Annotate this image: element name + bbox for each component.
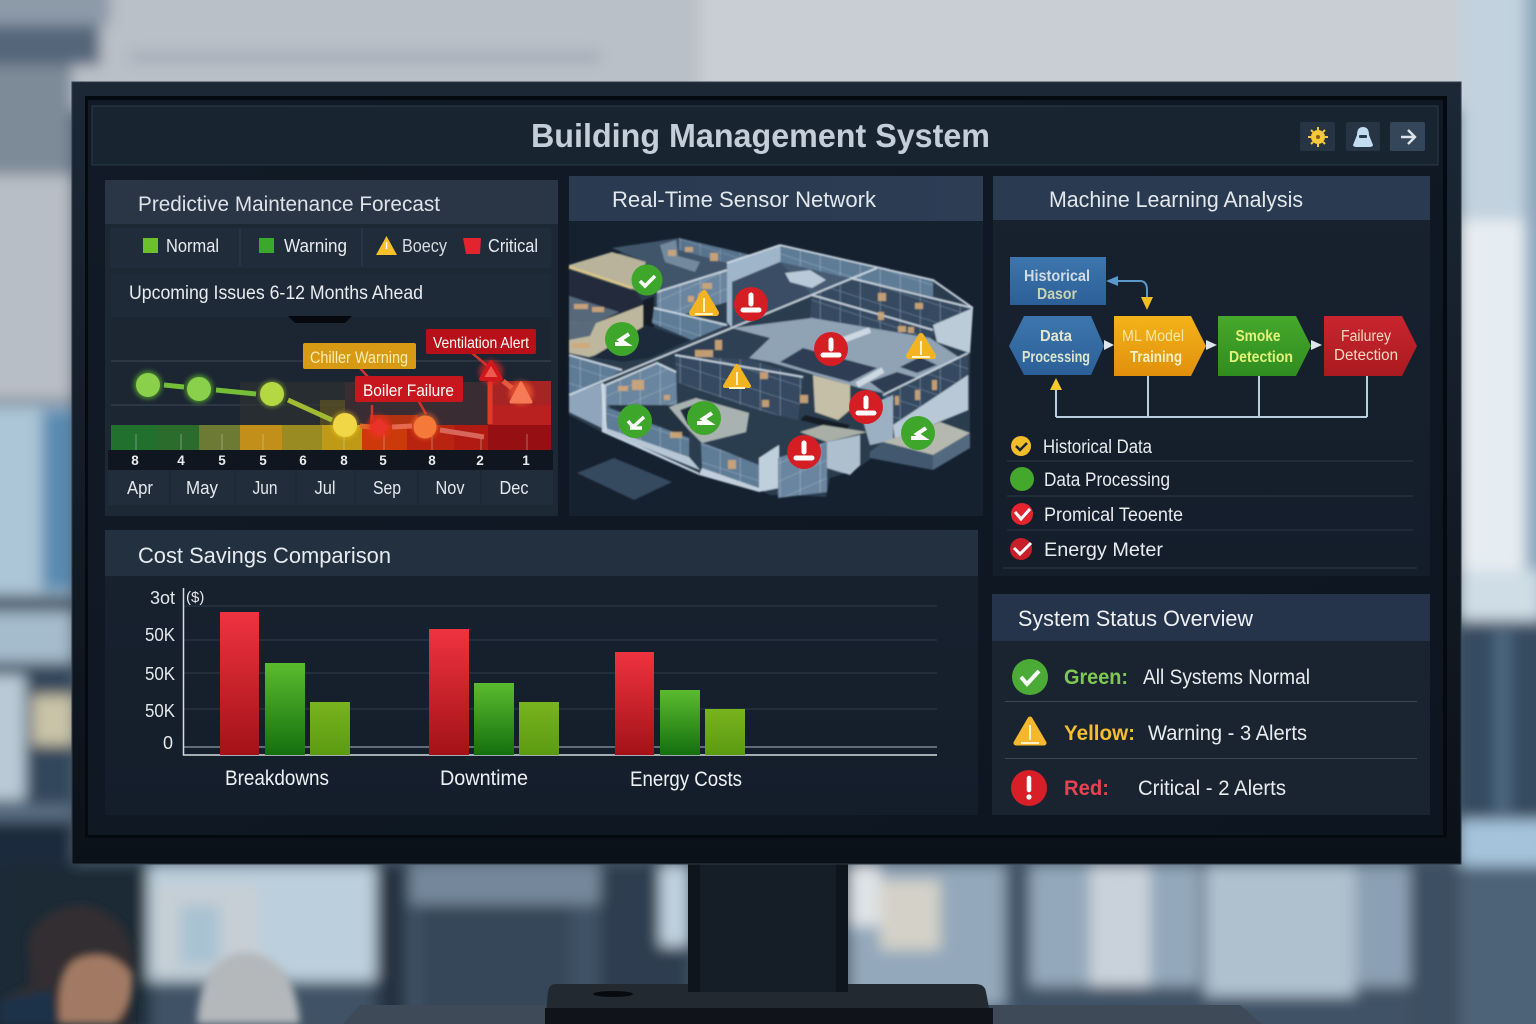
bar chart: ($) [186, 589, 204, 606]
list: ML inputs [1003, 436, 1417, 568]
icon: user [1346, 122, 1380, 151]
node: smoke detection [1218, 316, 1311, 376]
value row: 4 [177, 453, 185, 468]
month axis [108, 470, 553, 505]
value row: 8 [340, 453, 348, 468]
callout: boiler failure [355, 376, 463, 402]
status: yellow [1016, 719, 1307, 745]
value row: 2 [476, 453, 484, 468]
node: smoke detection: Smoke [1236, 328, 1281, 345]
icon: arrow [1390, 122, 1425, 151]
value row: 5 [259, 453, 267, 468]
node: data processing: Data [1040, 328, 1072, 345]
heading: predictive: Predictive Maintenance Forecast [138, 193, 440, 216]
value row: 6 [299, 453, 307, 468]
callout: chiller warning [303, 343, 416, 369]
right lower [883, 353, 968, 425]
bar chart: Breakdowns [225, 767, 329, 790]
list: ML inputs: Data Processing [1044, 470, 1170, 491]
node: historical data: Historical [1024, 268, 1090, 285]
bar chart: 50K [145, 664, 175, 684]
status: yellow: Yellow: [1064, 722, 1135, 745]
silhouette [569, 238, 973, 497]
month axis: Dec [500, 478, 528, 498]
back left glass [657, 270, 727, 322]
legend row: Critical [488, 236, 538, 256]
node: smoke detection: Detection [1229, 349, 1293, 366]
center back room [727, 245, 780, 328]
cream room top left [569, 252, 646, 290]
title: Building Management System [531, 117, 990, 154]
callout: boiler failure: Boiler Failure [363, 381, 454, 400]
monitor stand [545, 862, 993, 1024]
value row [108, 450, 553, 470]
heading: ML: Machine Learning Analysis [1049, 187, 1303, 212]
panel: predictive maintenance forecast [105, 180, 558, 516]
legend row: Warning [284, 236, 347, 256]
building isometric floorplan [569, 238, 973, 500]
panel: real-time sensor network [569, 176, 983, 516]
bar chart: 50K [145, 701, 175, 721]
sensors: critical [734, 287, 883, 469]
heading: sensor network: Real-Time Sensor Network [612, 187, 877, 212]
connectors [360, 353, 490, 420]
node: historical data [1010, 257, 1106, 305]
bar chart: Downtime [440, 767, 528, 790]
data points [134, 360, 533, 439]
centre floor [705, 318, 960, 395]
month axis: Jul [314, 478, 336, 498]
warm lights [572, 247, 937, 469]
value row: 8 [131, 453, 139, 468]
month axis: Nov [436, 478, 464, 498]
legend row [110, 228, 551, 268]
heading: cost savings: Cost Savings Comparison [138, 543, 391, 568]
monitor frame [72, 82, 1461, 864]
desk [343, 1005, 1262, 1024]
status: red [1011, 770, 1286, 806]
sensors: normal [605, 264, 935, 450]
forecast chart [111, 316, 551, 450]
list: ML inputs: Energy Meter [1044, 540, 1164, 561]
callout: ventilation alert [426, 329, 536, 354]
status: green: All Systems Normal [1143, 666, 1310, 689]
left lower rooms [569, 383, 602, 428]
month axis: Jun [252, 478, 278, 498]
front wall [602, 383, 699, 475]
value row: 5 [218, 453, 226, 468]
status: green: Green: [1064, 666, 1128, 689]
node: ML model training: Training [1130, 349, 1182, 366]
wall top edges [569, 245, 973, 430]
heat strip [111, 425, 551, 450]
panel: cost savings comparison [105, 530, 978, 815]
status: red: Critical - 2 Alerts [1138, 777, 1286, 800]
node: failure detection: Failurey [1341, 328, 1391, 345]
panel: machine learning analysis [993, 176, 1430, 576]
month axis: Sep [373, 478, 401, 498]
bar chart: Energy Costs [630, 768, 742, 791]
flow connectors [1050, 276, 1367, 417]
legend row: Normal [166, 236, 219, 256]
bar chart [145, 588, 937, 791]
node: ML model training: ML Model [1122, 328, 1184, 345]
node: data processing [1009, 316, 1104, 375]
legend row: Boecy [402, 236, 447, 256]
status: red: Red: [1064, 777, 1109, 800]
subheading: Upcoming Issues 6-12 Months Ahead [129, 283, 423, 304]
status: green [1012, 659, 1310, 695]
heading: status: System Status Overview [1018, 606, 1253, 631]
list: ML inputs: Promical Teoente [1044, 505, 1183, 526]
front centre [759, 445, 779, 492]
central glass wall [675, 355, 803, 420]
month axis: May [186, 478, 218, 498]
value row: 1 [522, 453, 530, 468]
month axis: Apr [127, 478, 153, 498]
background people [0, 905, 300, 1024]
node: failure detection: Detection [1334, 347, 1398, 364]
back left room [612, 238, 751, 292]
node: failure detection [1324, 316, 1417, 376]
trend line [164, 381, 512, 437]
node: data processing: Processing [1022, 349, 1090, 366]
callout: chiller warning: Chiller Warning [310, 348, 408, 367]
node: ML model training [1114, 316, 1206, 376]
node: historical data: Dasor [1037, 286, 1077, 303]
value row: 8 [428, 453, 436, 468]
list: ML inputs: Historical Data [1043, 437, 1152, 458]
panel: system status overview [992, 594, 1430, 815]
status: yellow: Warning - 3 Alerts [1148, 722, 1307, 745]
sensors: warning [692, 293, 933, 388]
value row: 5 [379, 453, 387, 468]
icon: settings gear [1300, 122, 1335, 151]
right rear dark room [810, 278, 973, 338]
subheading [111, 274, 551, 317]
bar chart: 50K [145, 625, 175, 645]
bar chart: 3ot [150, 588, 175, 608]
callout: ventilation alert: Ventilation Alert [433, 335, 529, 352]
bar chart: 0 [163, 733, 173, 753]
title bar [92, 106, 1438, 165]
